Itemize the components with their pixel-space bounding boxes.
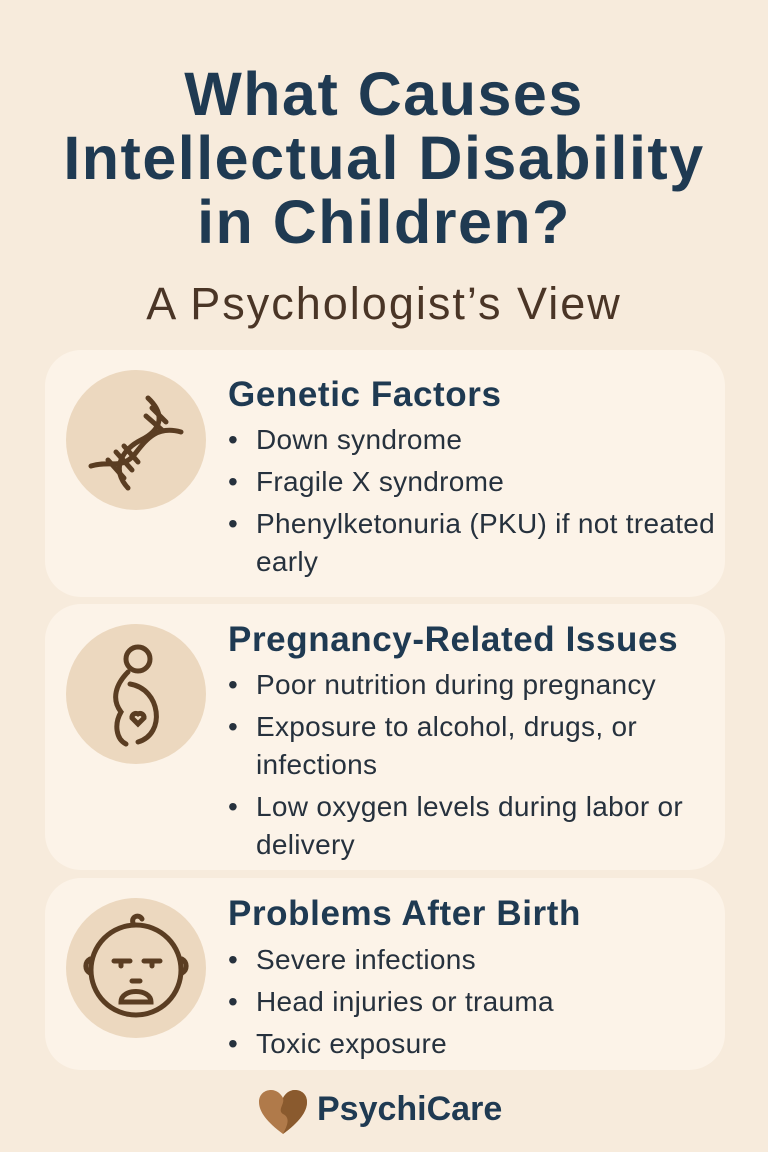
bullet list: Poor nutrition during pregnancy <box>256 669 656 700</box>
bullet list: Head injuries or trauma <box>256 986 554 1017</box>
bullet list: delivery <box>256 829 355 860</box>
bullet list: Low oxygen levels during labor or <box>256 791 683 822</box>
bullet list <box>229 669 683 860</box>
icon: pregnant woman <box>66 624 206 764</box>
brand name: PsychiCare <box>317 1090 502 1128</box>
bullet list <box>229 424 715 577</box>
panel: problems after birth <box>45 878 725 1070</box>
bullet list: Down syndrome <box>256 424 462 455</box>
heading: Problems After Birth <box>228 894 581 933</box>
icon: heart logo <box>259 1090 307 1134</box>
heading: Pregnancy-Related Issues <box>228 620 678 659</box>
title <box>63 60 705 256</box>
bullet list: Fragile X syndrome <box>256 466 504 497</box>
bullet list <box>229 944 554 1059</box>
title: What Causes <box>184 60 584 128</box>
panel: genetic factors <box>45 350 725 597</box>
icon: crying baby <box>66 898 206 1038</box>
logo <box>259 1090 502 1134</box>
bullet list: infections <box>256 749 377 780</box>
title: Intellectual Disability <box>63 124 705 192</box>
panel: pregnancy-related issues <box>45 604 725 870</box>
bullet list: Severe infections <box>256 944 476 975</box>
title: in Children? <box>197 188 571 256</box>
bullet list: early <box>256 546 318 577</box>
icon: DNA <box>66 370 206 510</box>
subtitle: A Psychologist’s View <box>146 278 622 329</box>
bullet list: Phenylketonuria (PKU) if not treated <box>256 508 715 539</box>
bullet list: Toxic exposure <box>256 1028 447 1059</box>
bullet list: Exposure to alcohol, drugs, or <box>256 711 637 742</box>
heading: Genetic Factors <box>228 375 502 414</box>
